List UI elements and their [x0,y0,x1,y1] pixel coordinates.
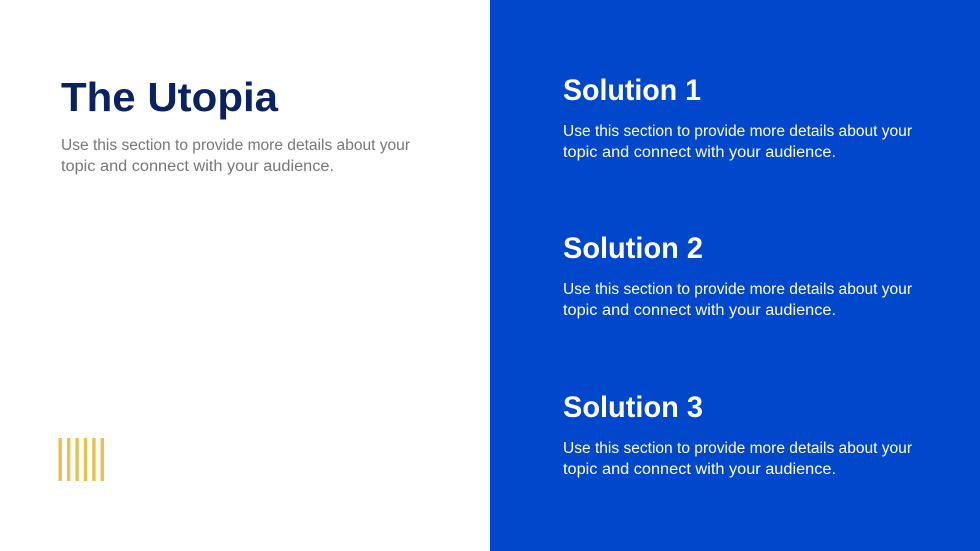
panel: solution 1 [563,74,912,161]
text block: solution 2 details: topic and connect with your audience. [563,302,836,319]
panel: left white background [0,0,490,551]
text block: solution 1 details: topic and connect with your audience. [563,144,836,161]
panel: solution 2 [563,232,912,319]
icon: yellow vertical bars [58,438,104,481]
heading: solution 1: Solution 1 [563,74,701,107]
text block: solution 3 details [563,440,912,478]
panel: right blue background [490,0,980,551]
heading: solution 2: Solution 2 [563,232,703,265]
title: The Utopia [61,74,279,120]
heading: solution 3: Solution 3 [563,391,703,424]
text block: intro: topic and connect with your audience. [61,158,334,175]
text block: solution 1 details: Use this section to provide more details about your [563,123,912,140]
text block: intro [61,137,410,175]
text block: solution 3 details: Use this section to provide more details about your [563,440,912,457]
text block: solution 2 details [563,281,912,319]
text block: intro: Use this section to provide more details about your [61,137,410,154]
text block: solution 2 details: Use this section to provide more details about your [563,281,912,298]
panel: solution 3 [563,391,912,478]
text block: solution 3 details: topic and connect with your audience. [563,461,836,478]
text block: solution 1 details [563,123,912,161]
